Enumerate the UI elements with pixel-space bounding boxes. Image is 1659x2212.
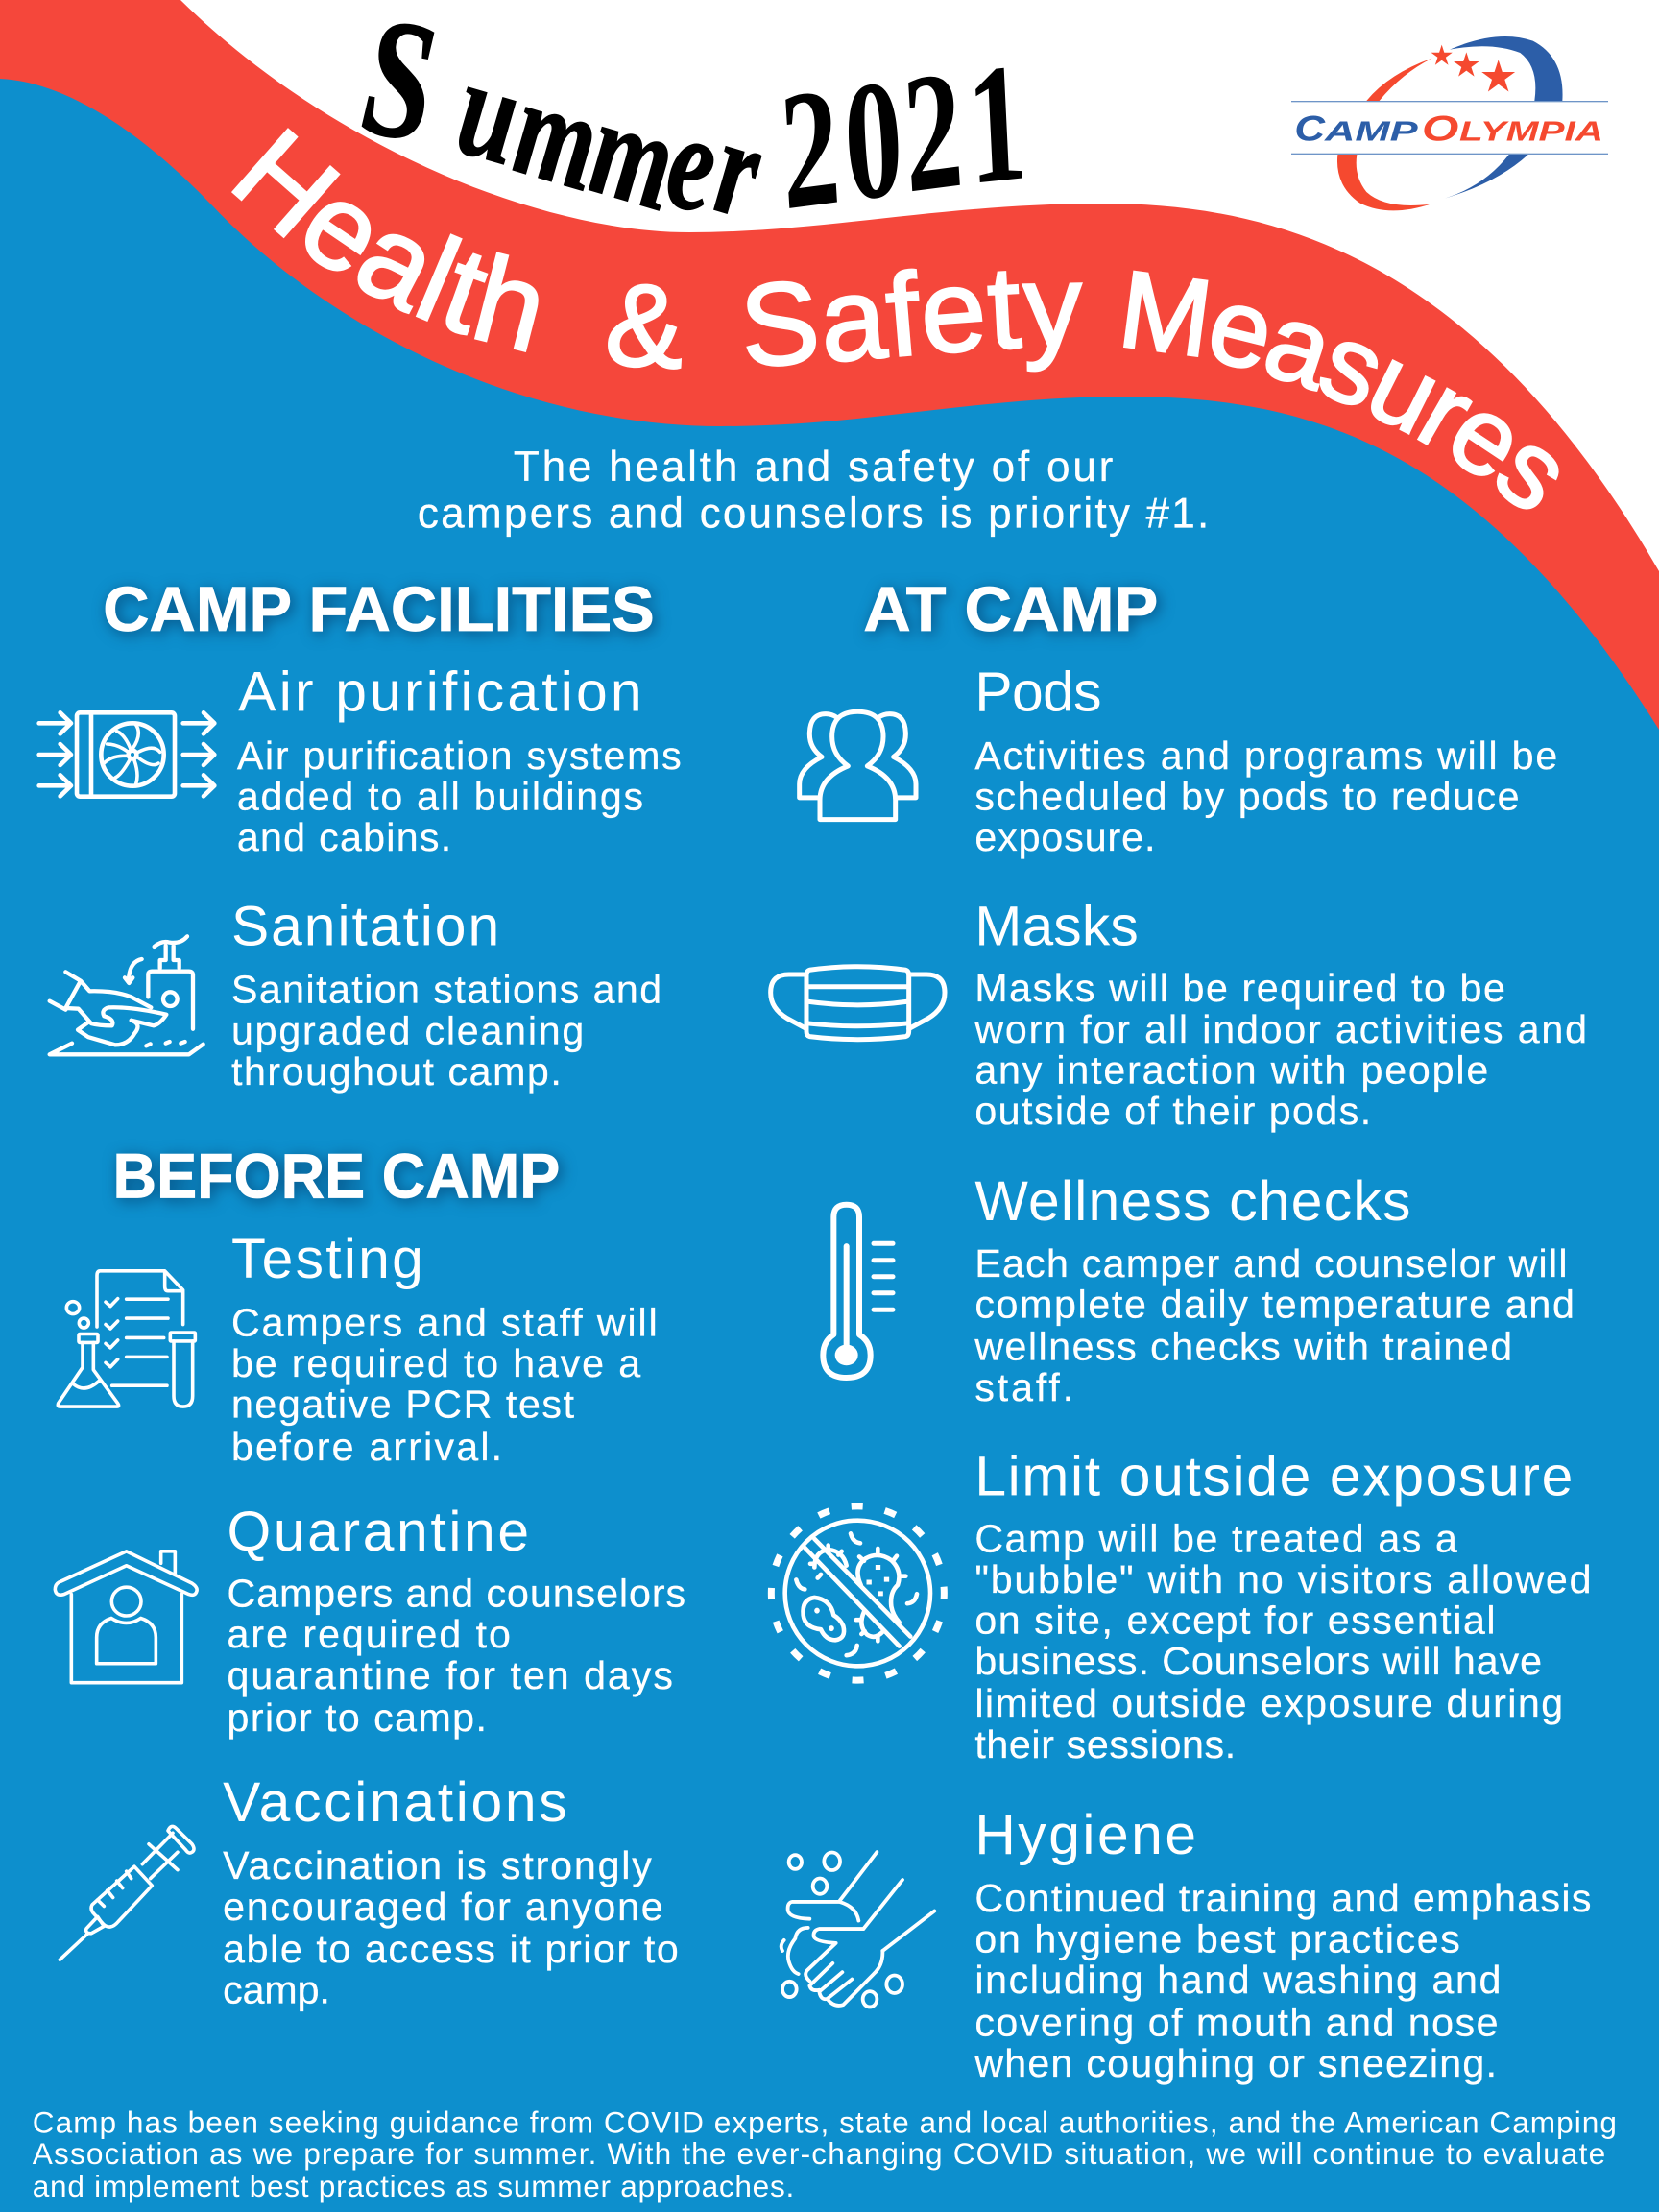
intro text: The health and safety of our (514, 444, 1113, 491)
panel: pods (800, 661, 1557, 859)
body text: able to access it prior to (223, 1927, 679, 1971)
body text (231, 1301, 658, 1469)
panel: limit outside exposure (771, 1446, 1591, 1767)
title: Health & Safety Measures: & (608, 284, 682, 370)
body text: on hygiene best practices (974, 1917, 1460, 1961)
body text (223, 1843, 679, 2012)
panel: wellness checks (823, 1170, 1575, 1409)
body text: Camp will be treated as a (974, 1516, 1457, 1560)
icon: air purifier (39, 712, 214, 797)
heading: Camp Facilities: CAMP FACILITIES (103, 574, 655, 645)
body text: prior to camp. (228, 1695, 487, 1740)
body text: Air purification systems (237, 733, 682, 778)
icon: syringe (60, 1826, 194, 1960)
body text: outside of their pods. (974, 1089, 1371, 1133)
heading: Before Camp: BEFORE CAMP (113, 1142, 560, 1213)
body text: throughout camp. (231, 1049, 562, 1094)
footer text (33, 2105, 1617, 2203)
icon: group of people (800, 711, 916, 820)
body text: staff. (974, 1365, 1073, 1409)
icon: no germs (771, 1506, 944, 1680)
title: Health & Safety Measures: Measures (1123, 271, 1559, 509)
heading: Air purification (238, 661, 642, 724)
icon: thermometer (823, 1205, 893, 1378)
body text: before arrival. (231, 1425, 502, 1469)
body text: Sanitation stations and (231, 968, 661, 1012)
body text: Campers and counselors (228, 1572, 685, 1616)
panel: quarantine (55, 1501, 685, 1740)
title: Health & Safety Measures (231, 128, 1559, 509)
body text: limited outside exposure during (974, 1681, 1563, 1725)
body text: on site, except for essential (974, 1599, 1496, 1643)
body text: negative PCR test (231, 1382, 575, 1427)
body text (974, 1241, 1575, 1409)
body text: Continued training and emphasis (974, 1876, 1591, 1920)
panel: sanitation (50, 895, 661, 1094)
body text: "bubble" with no visitors allowed (974, 1557, 1591, 1601)
logo: Camp Olympia: O (1422, 108, 1458, 149)
body text: Masks will be required to be (974, 966, 1505, 1010)
body text: added to all buildings (237, 774, 643, 818)
heading: Hygiene (974, 1804, 1196, 1866)
body text (974, 733, 1557, 859)
panel: testing (58, 1228, 658, 1469)
title: Summer 2021 (356, 0, 1030, 251)
body text: Activities and programs will be (974, 733, 1557, 778)
heading: Vaccinations (223, 1771, 567, 1834)
body text: upgraded cleaning (231, 1008, 584, 1052)
heading: Sanitation (231, 895, 499, 957)
body text: scheduled by pods to reduce (974, 774, 1520, 818)
icon: checklist with flask and test tube (58, 1271, 195, 1407)
body text: Campers and staff will (231, 1301, 658, 1345)
heading: Wellness checks (974, 1170, 1410, 1233)
title: Health & Safety Measures: Safety (746, 269, 1083, 373)
footer text: and implement best practices as summer approaches. (33, 2169, 794, 2203)
body text: are required to (228, 1612, 511, 1656)
heading: Pods (974, 661, 1102, 724)
panel: hygiene (781, 1804, 1591, 2085)
body text: covering of mouth and nose (974, 2000, 1498, 2044)
body text: and cabins. (237, 815, 451, 859)
body text: when coughing or sneezing. (974, 2041, 1497, 2085)
logo: Camp Olympia (1291, 36, 1608, 210)
intro text: campers and counselors is priority #1. (418, 491, 1209, 538)
icon: hand washing (781, 1852, 934, 2007)
icon: person in house (55, 1551, 197, 1683)
body text (974, 1876, 1591, 2085)
heading: At Camp: AT CAMP (863, 574, 1158, 645)
body text (228, 1572, 685, 1740)
body text (974, 1516, 1591, 1767)
body text (974, 966, 1587, 1133)
body text: quarantine for ten days (228, 1653, 673, 1697)
body text: complete daily temperature and (974, 1282, 1575, 1326)
body text: any interaction with people (974, 1047, 1488, 1092)
body text (231, 968, 661, 1094)
heading: Quarantine (228, 1501, 529, 1563)
body text (237, 733, 682, 859)
logo: Camp Olympia: C (1294, 108, 1326, 149)
body text: Each camper and counselor will (974, 1241, 1567, 1286)
body text: their sessions. (974, 1722, 1236, 1767)
panel: vaccinations (60, 1771, 679, 2012)
heading: Masks (974, 895, 1139, 957)
body text: worn for all indoor activities and (974, 1007, 1587, 1051)
footer text: Camp has been seeking guidance from COVID experts, state and local authorities, and the American Camping (33, 2105, 1617, 2140)
heading: Testing (231, 1228, 423, 1290)
title: Summer 2021: ummer (449, 27, 770, 251)
title: Summer 2021: 2021 (776, 28, 1030, 246)
body text: encouraged for anyone (223, 1885, 663, 1929)
title: Health & Safety Measures: Health (231, 128, 539, 352)
body text: be required to have a (231, 1341, 640, 1385)
icon: sanitizer and wiping hand (50, 936, 204, 1054)
body text: Vaccination is strongly (223, 1843, 652, 1887)
icon: face mask (771, 967, 945, 1040)
logo: Camp Olympia: LYMPIA (1459, 117, 1603, 148)
heading: Limit outside exposure (974, 1446, 1573, 1508)
body text: exposure. (974, 815, 1155, 859)
intro text (418, 444, 1209, 538)
footer text: Association as we prepare for summer. With the ever-changing COVID situation, we will continue to evaluate (33, 2136, 1605, 2171)
body text: including hand washing and (974, 1958, 1501, 2002)
panel: masks (771, 895, 1587, 1133)
logo: Camp Olympia: AMP (1323, 117, 1419, 148)
body text: wellness checks with trained (974, 1324, 1512, 1368)
body text: business. Counselors will have (974, 1639, 1542, 1683)
body text: camp. (223, 1968, 330, 2012)
panel: air purification (39, 661, 682, 859)
